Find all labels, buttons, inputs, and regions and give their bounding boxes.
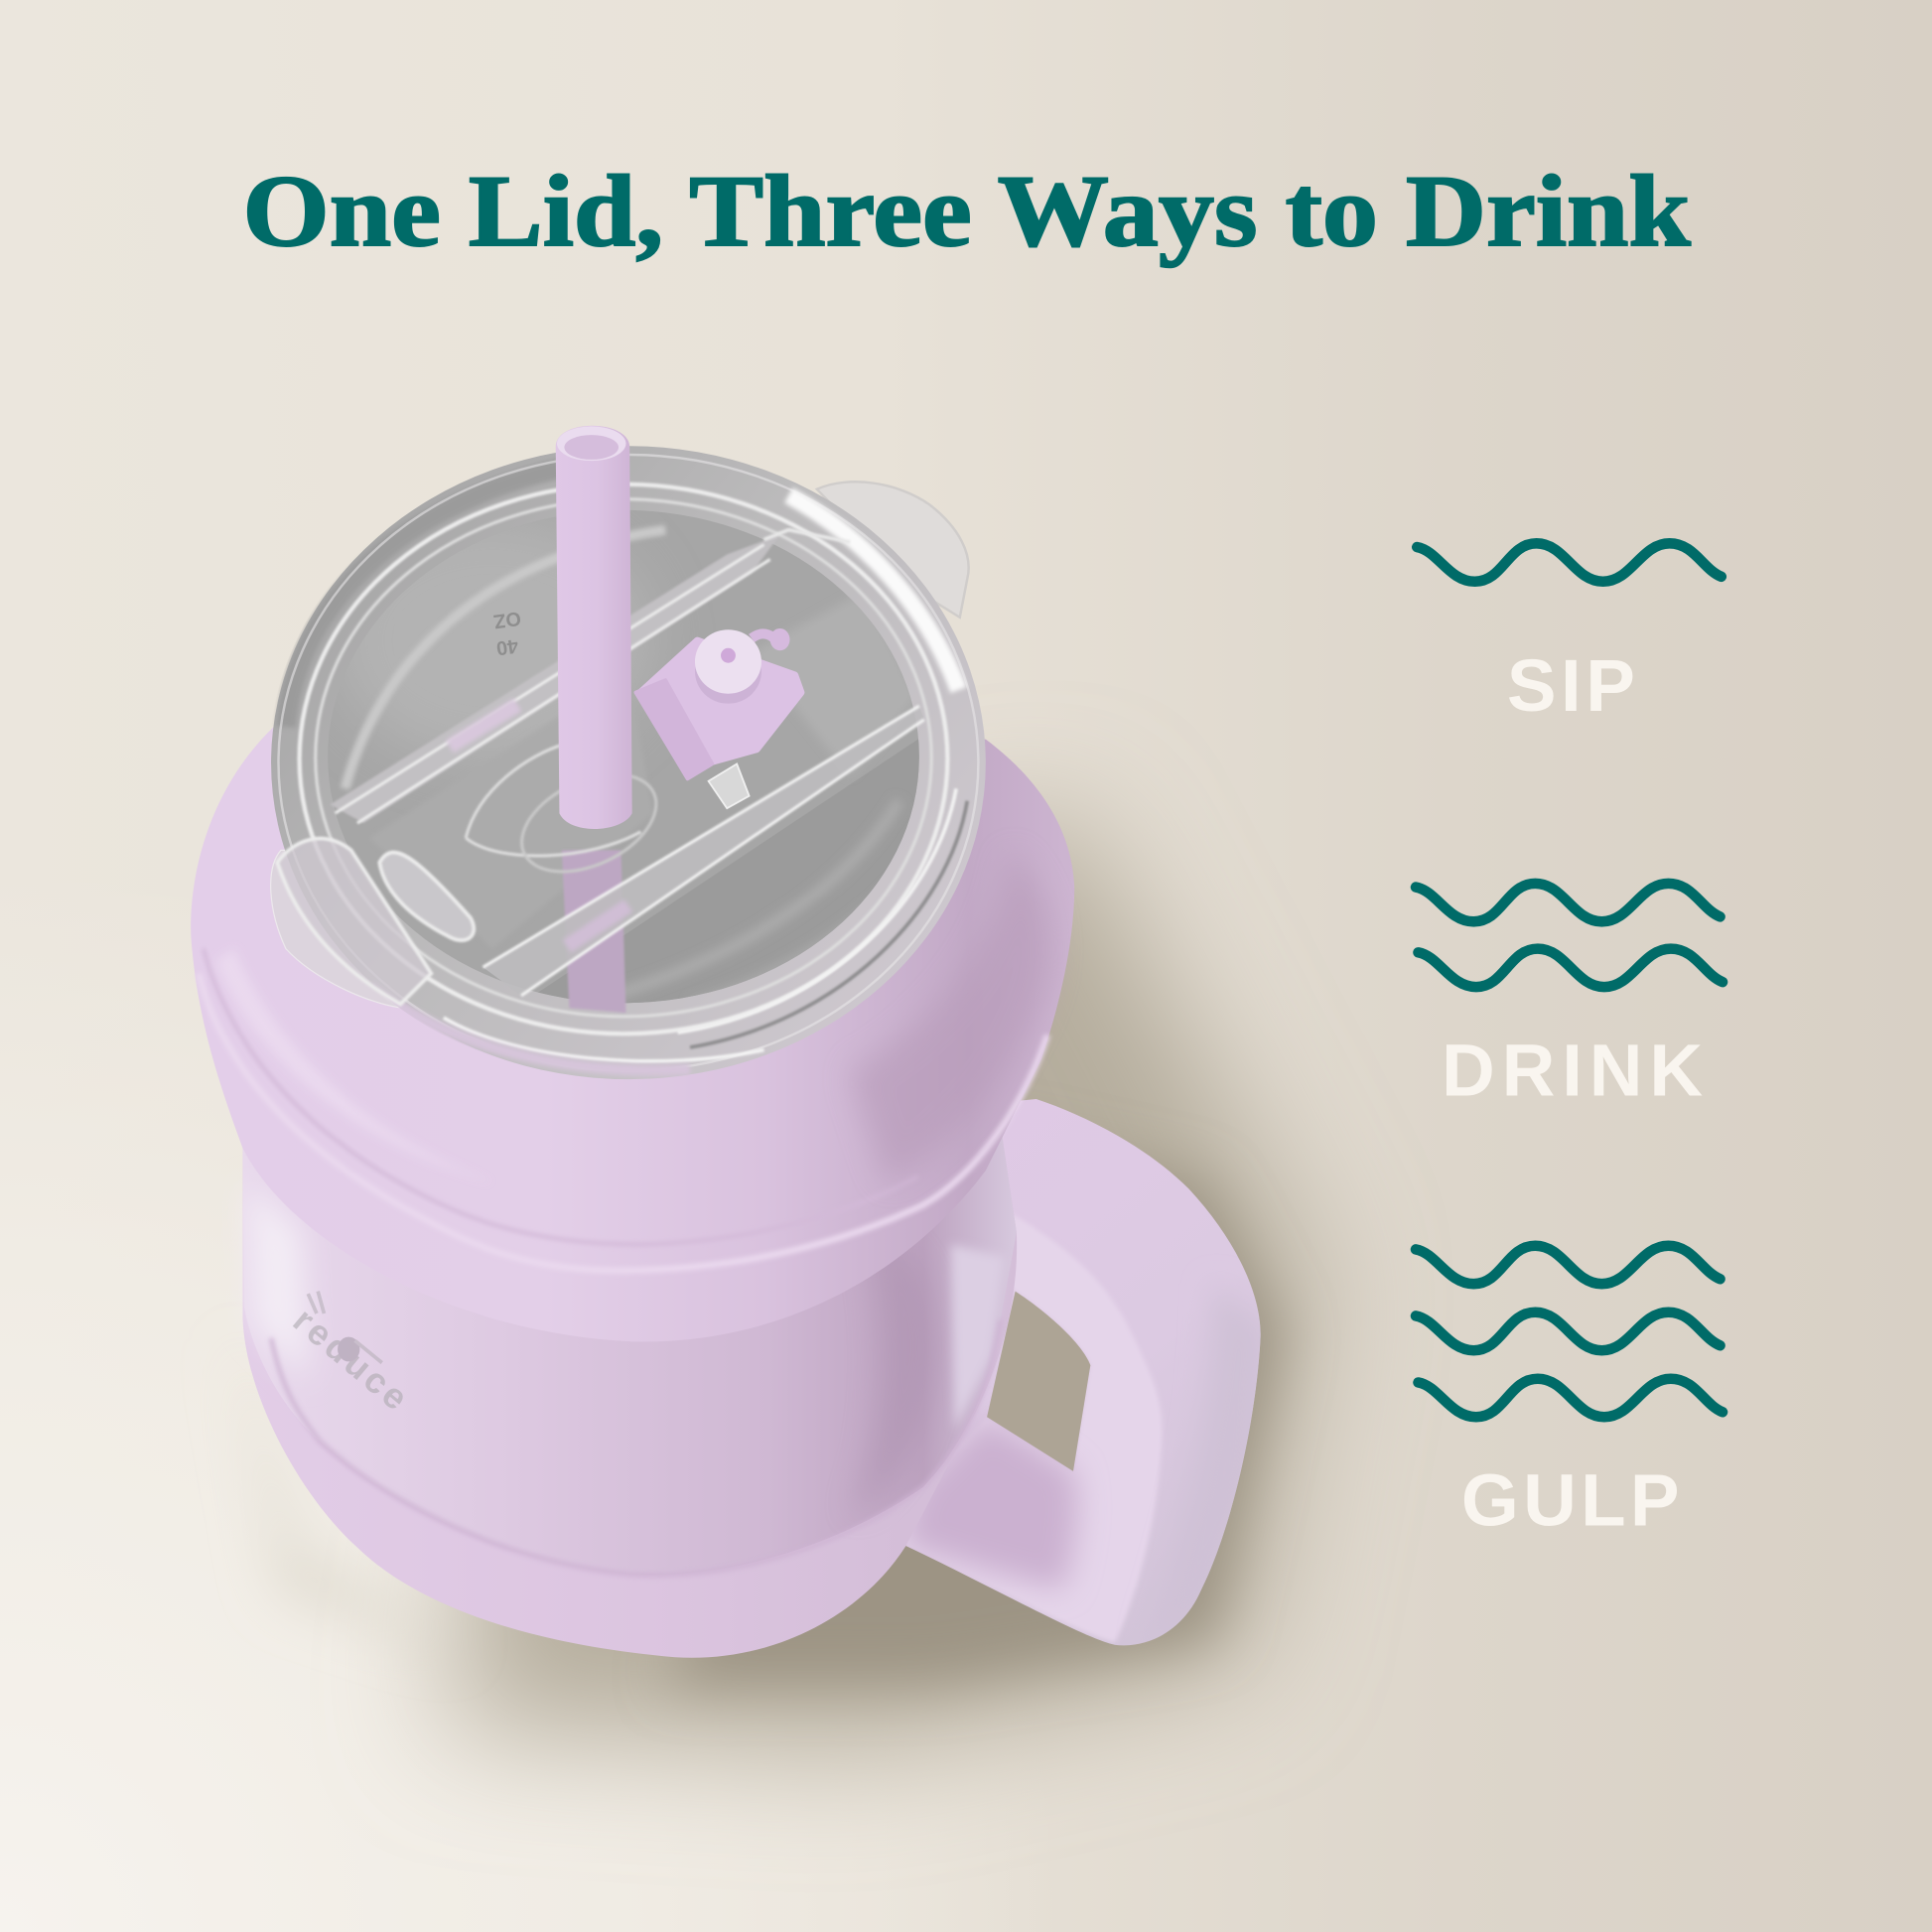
lower slider rail [483, 706, 924, 996]
mug body [242, 1109, 1017, 1658]
title: One Lid, Three Ways to Drink [242, 155, 1692, 268]
drink label: DRINK [1442, 1029, 1703, 1111]
clear lid [271, 426, 986, 1084]
handle opening [987, 1292, 1090, 1471]
brand logo: reduce [286, 1300, 419, 1420]
lid latch [277, 839, 431, 1004]
gulp wave icon [1416, 1246, 1723, 1417]
silicone stopper [635, 628, 801, 778]
straw [556, 426, 632, 829]
lid outer rim [271, 446, 986, 1079]
capacity markings: OZ [492, 607, 522, 632]
mug shadow [234, 813, 1318, 1749]
gulp label: GULP [1461, 1458, 1680, 1541]
sip wave icon [1417, 543, 1722, 582]
straw seat [466, 745, 671, 892]
lid interior [328, 510, 919, 1003]
mug [191, 727, 1269, 1658]
straw reflection [562, 850, 625, 1013]
drinking mode: sip [1417, 543, 1722, 727]
upper slider rail [331, 530, 850, 823]
capacity markings [492, 607, 522, 659]
drink wave icon [1416, 884, 1723, 987]
lid tab: upper right [817, 482, 969, 618]
capacity markings: 40 [494, 634, 519, 659]
drinking mode: drink [1416, 884, 1723, 1111]
hinge clip [709, 763, 750, 808]
drinking mode: gulp [1416, 1246, 1723, 1541]
pill vent [379, 853, 474, 940]
lid tab: lower left [271, 850, 431, 1008]
mug handle [905, 1099, 1261, 1646]
mug shoulder [191, 727, 1074, 1342]
sip label: SIP [1507, 644, 1635, 727]
